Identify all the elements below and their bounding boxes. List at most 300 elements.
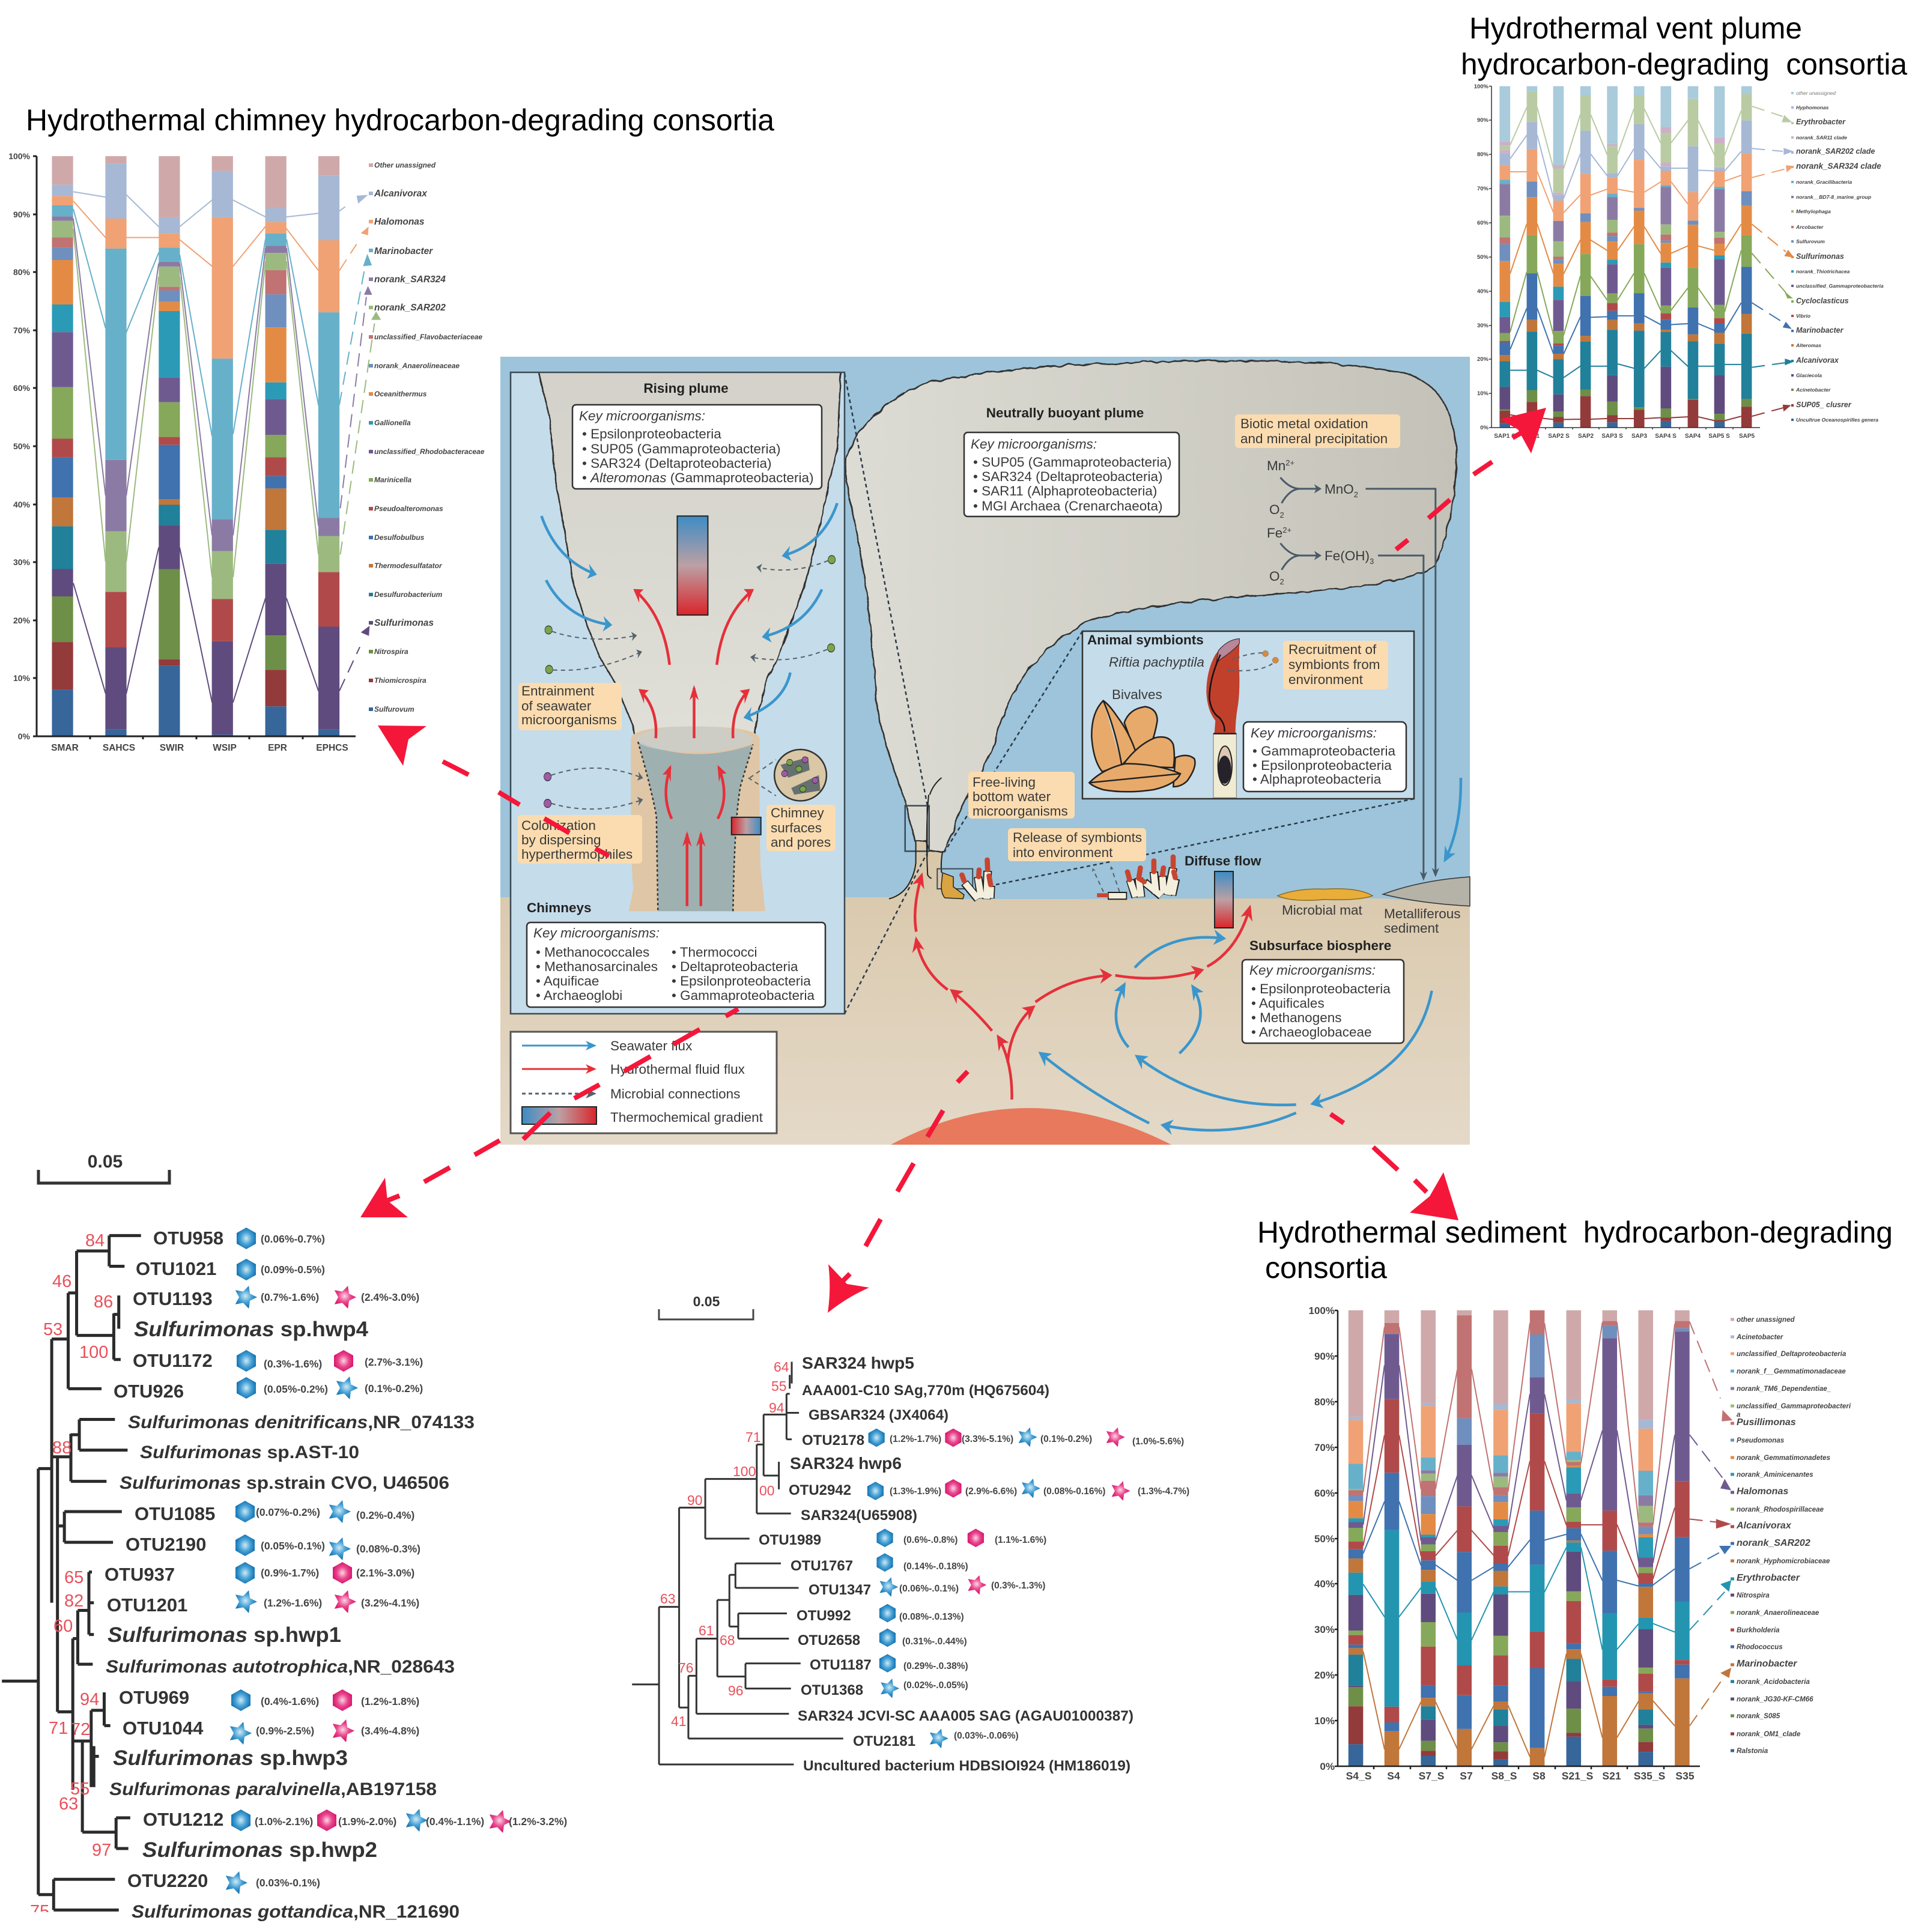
sediment axes <box>1335 1310 1700 1769</box>
taxon labels: OTU937 <box>105 1564 175 1585</box>
taxon labels: OTU1021 <box>136 1258 216 1279</box>
flux legend: Thermochemical gradient <box>610 1110 763 1125</box>
abundance icons and ranges: (0.2%-0.4%) <box>356 1509 414 1521</box>
abundance icons and ranges: (0.03%-0.1%) <box>256 1877 320 1889</box>
plume legend: norank_SAR202 clade <box>1796 147 1875 156</box>
thermochemical gradient, chimney wall <box>732 817 761 835</box>
taxon labels: OTU2181 <box>853 1733 915 1749</box>
plume legend: Methylophaga <box>1796 208 1831 214</box>
sediment x-axis labels: S4 <box>1387 1770 1400 1782</box>
reaction labels: O <box>1269 569 1280 584</box>
bootstrap values: 65 <box>64 1568 83 1587</box>
sediment legend: Pseudomonas <box>1737 1437 1785 1444</box>
title: hydrothermal chimney: Hydrothermal chimney hydrocarbon-degrading consortia <box>26 103 774 137</box>
magma dome <box>891 1108 1171 1145</box>
abundance icons and ranges: (3.2%-4.1%) <box>361 1597 419 1609</box>
rising plume drawing <box>537 365 841 911</box>
key microorganisms: neutrally buoyant plume: • SAR11 (Alphaproteobacteria) <box>973 483 1157 498</box>
zoom dotted connectors <box>845 374 1414 1014</box>
taxon labels: OTU2658 <box>798 1632 860 1649</box>
callout: recruitment <box>1283 641 1388 689</box>
riftia label: Riftia pachyptila <box>1109 655 1204 670</box>
key microorganisms: chimneys: • Gammaproteobacteria <box>672 988 815 1003</box>
sediment x-axis labels: S8 <box>1532 1770 1546 1782</box>
callout: chimney surfaces: and pores <box>771 835 831 850</box>
diffuse flow gradient <box>1215 871 1233 928</box>
sediment y-axis labels <box>1309 1305 1335 1772</box>
key microorganisms: rising plume: • Epsilonproteobacteria <box>582 426 721 441</box>
taxon labels: SAR324 hwp6 <box>790 1454 902 1473</box>
abundance icons and ranges: (0.1%-0.2%) <box>365 1382 423 1394</box>
abundance icons and ranges: (0.05%-0.2%) <box>264 1383 328 1395</box>
plume y-axis labels: 20% <box>1477 356 1489 363</box>
taxon labels: OTU2942 <box>789 1482 851 1498</box>
sediment legend: Burkholderia <box>1737 1626 1780 1634</box>
taxon labels: GBSAR324 (JX4064) <box>809 1407 948 1423</box>
sediment legend: norank_Hyphomicrobiaceae <box>1737 1557 1830 1565</box>
chimney legend: Marinicella <box>374 476 411 484</box>
plume bars and connectors <box>1505 86 1794 428</box>
taxon labels: OTU1201 <box>107 1594 187 1616</box>
abundance icons and ranges: (0.08%-0.16%) <box>1043 1486 1105 1497</box>
key microorganisms: subsurface: • Methanogens <box>1251 1010 1341 1025</box>
chimney legend: unclassified_Rhodobacteraceae <box>374 447 485 456</box>
bootstrap values <box>30 1231 113 1921</box>
abundance icons and ranges: (0.31%-.0.44%) <box>902 1637 967 1647</box>
plume legend: SUP05_ clusrer <box>1796 401 1852 409</box>
bootstrap values: 55 <box>771 1378 787 1394</box>
abundance icons and ranges: (0.02%-.0.05%) <box>903 1680 968 1691</box>
chimney x-axis labels: SWIR <box>160 743 184 753</box>
plume legend: Uncultrue Oceanospirilles genera <box>1796 417 1878 423</box>
key microorganisms: rising plume: • Alteromonas (Gammaproteobacteria) <box>582 470 814 485</box>
title: hydrothermal sediment <box>1257 1216 1893 1285</box>
taxon labels: OTU2178 <box>802 1432 864 1449</box>
taxon labels: OTU1767 <box>791 1558 853 1574</box>
sediment legend: norank_OM1_clade <box>1737 1730 1801 1738</box>
bootstrap values: 90 <box>687 1492 703 1508</box>
sediment legend: norank_Anaerolineaceae <box>1737 1609 1819 1617</box>
sediment y-axis labels: 10% <box>1314 1715 1335 1727</box>
metalliferous sediment mound <box>1383 877 1470 906</box>
sediment legend: unclassified_Gammaproteobacteri <box>1737 1402 1851 1410</box>
chimney x-axis labels: SAHCS <box>103 743 135 753</box>
bootstrap values: 63 <box>660 1591 676 1606</box>
taxon labels: Sulfurimonas gottandica ,NR_121690 <box>132 1902 460 1922</box>
abundance icons and ranges: (1.2%-1.6%) <box>264 1597 322 1609</box>
bootstrap values: 00 <box>759 1483 775 1498</box>
chimney legend: Halomonas <box>374 217 425 227</box>
plume x-axis labels: SAP5 <box>1739 433 1755 440</box>
reaction labels: 2+ <box>1282 525 1291 534</box>
plume legend: Acinetobacter <box>1795 387 1831 393</box>
bootstrap values: 82 <box>64 1591 83 1611</box>
arrow: to plume chart <box>1396 408 1546 550</box>
taxon labels: OTU969 <box>119 1687 189 1708</box>
key microorganisms: neutrally buoyant plume: • SAR324 (Deltaproteobacteria) <box>973 469 1163 484</box>
key microorganisms: rising plume: • SUP05 (Gammaproteobacteria) <box>582 441 781 456</box>
sediment y-axis labels: 0% <box>1320 1761 1335 1772</box>
bootstrap values: 71 <box>745 1429 761 1445</box>
bootstrap values: 75 <box>30 1902 49 1921</box>
plume x-axis labels: SAP5 S <box>1708 433 1730 440</box>
metalliferous sediment label: sediment <box>1384 921 1439 936</box>
seafloor sediment <box>500 841 1470 1145</box>
sediment legend: norank_TM6_Dependentiae_ <box>1737 1385 1831 1393</box>
sediment y-axis labels: 60% <box>1314 1488 1335 1499</box>
abundance icons and ranges <box>867 1425 1189 1749</box>
abundance icons and ranges: (1.3%-4.7%) <box>1138 1486 1189 1497</box>
taxon labels: Sulfurimonas sp.strain CVO, U46506 <box>120 1473 449 1493</box>
taxon labels: Sulfurimonas sp.AST-10 <box>140 1443 359 1462</box>
chimney y-axis labels: 80% <box>13 267 31 277</box>
neutrally buoyant plume <box>846 361 1456 851</box>
bootstrap values: 46 <box>52 1272 71 1291</box>
abundance icons and ranges: (0.9%-2.5%) <box>256 1725 314 1737</box>
taxon labels: OTU2220 <box>127 1870 208 1891</box>
key microorganisms: subsurface <box>1242 960 1404 1043</box>
middle phylogenetic tree: SAR324 <box>632 1294 1189 1774</box>
chimney y-axis labels: 30% <box>13 557 31 567</box>
plume legend: norank__BD7-8_marine_group <box>1796 194 1871 200</box>
reaction labels <box>1267 458 1374 586</box>
title: hydrothermal sediment: consortia <box>1265 1251 1387 1285</box>
abundance icons and ranges: (2.9%-6.6%) <box>965 1486 1017 1497</box>
plume y-axis labels: 60% <box>1477 220 1489 226</box>
sediment x-axis labels <box>1346 1770 1695 1782</box>
chimney legend <box>369 161 485 713</box>
key microorganisms: neutrally buoyant plume: Key microorganisms: <box>971 437 1097 452</box>
chimney y-axis labels: 100% <box>8 151 31 161</box>
abundance icons and ranges: (1.9%-2.0%) <box>338 1815 396 1828</box>
arrow: to SAR324 tree <box>828 1071 968 1313</box>
chimney legend: Marinobacter <box>374 246 433 256</box>
abundance icons and ranges: (1.3%-1.9%) <box>890 1486 941 1497</box>
sediment legend: norank_Aminicenantes <box>1737 1471 1813 1479</box>
bootstrap values: 100 <box>733 1464 756 1479</box>
plume legend: Vibrio <box>1796 313 1810 319</box>
plume y-axis labels: 90% <box>1477 117 1489 124</box>
taxon labels: OTU1212 <box>143 1809 223 1830</box>
sediment legend: norank_Gemmatimonadetes <box>1737 1454 1830 1462</box>
chimney y-axis labels: 50% <box>13 441 31 451</box>
callout: colonization: hyperthermophiles <box>521 847 633 862</box>
plume legend: Arcobacter <box>1795 224 1824 230</box>
abundance icons and ranges: (1.2%-1.7%) <box>890 1434 941 1444</box>
bootstrap values: 94 <box>80 1690 99 1709</box>
callout: chimney surfaces: Chimney <box>771 805 825 820</box>
bootstrap values: 71 <box>49 1719 68 1738</box>
key microorganisms box: • Epsilonproteobacteria <box>1252 758 1392 773</box>
key microorganisms: neutrally buoyant plume: • SUP05 (Gammaproteobacteria) <box>973 455 1172 470</box>
key microorganisms: chimneys: • Methanococcales <box>536 945 649 960</box>
key microorganisms box <box>1243 722 1406 792</box>
plume legend: norank_Thiotrichacea <box>1796 268 1850 274</box>
sediment legend: Marinobacter <box>1737 1659 1797 1669</box>
key microorganisms: subsurface: • Aquificales <box>1251 996 1325 1011</box>
sediment legend: Nitrospira <box>1737 1591 1770 1599</box>
abundance icons and ranges: (0.4%-1.6%) <box>261 1695 319 1707</box>
animal symbionts heading: Animal symbionts <box>1087 632 1204 647</box>
key microorganisms: subsurface: Key microorganisms: <box>1249 963 1376 978</box>
key microorganisms: chimneys: • Archaeoglobi <box>536 988 622 1003</box>
sediment y-axis labels: 70% <box>1314 1442 1335 1453</box>
chimney legend: Desulfobulbus <box>374 533 425 542</box>
taxon labels: OTU1187 <box>810 1657 872 1673</box>
sediment legend <box>1731 1316 1851 1755</box>
tubeworm and bivalve communities <box>941 857 1176 899</box>
bootstrap values: 60 <box>53 1617 73 1636</box>
plume legend: Alteromas <box>1795 342 1821 348</box>
abundance icons and ranges: (3.4%-4.8%) <box>361 1725 419 1737</box>
chimney x-axis labels <box>51 743 348 753</box>
taxon labels: OTU1193 <box>133 1288 213 1309</box>
abundance icons and ranges: (0.1%-0.2%) <box>1040 1434 1092 1444</box>
plume legend: Hyphomonas <box>1796 104 1829 111</box>
chimney legend: Sulfurovum <box>374 705 414 713</box>
abundance icons and ranges: (0.9%-1.7%) <box>261 1567 319 1579</box>
plume legend: norank_SAR324 clade <box>1796 162 1881 171</box>
taxon labels: Uncultured bacterium HDBSIOI924 (HM186019) <box>803 1758 1130 1774</box>
chimney x-axis labels: WSIP <box>213 743 237 753</box>
chimneys heading: Chimneys <box>527 900 592 915</box>
taxon labels: OTU1368 <box>801 1682 863 1698</box>
bootstrap values: 88 <box>52 1438 71 1458</box>
sediment legend: Ralstonia <box>1737 1747 1768 1755</box>
chimney legend: Thiomicrospira <box>374 676 426 685</box>
callout: chimney surfaces <box>766 805 836 851</box>
chimney bars and connectors <box>62 156 381 736</box>
chimney y-axis labels: 40% <box>13 500 31 509</box>
callout: release of symbionts: Release of symbionts <box>1013 830 1142 845</box>
flux legend: Hydrothermal fluid flux <box>610 1062 745 1077</box>
sediment legend: norank_S085 <box>1737 1712 1780 1720</box>
callout: biotic metal oxidation: Biotic metal oxidation <box>1240 416 1368 431</box>
sediment legend: norank_Rhodospirillaceae <box>1737 1506 1824 1513</box>
abundance icons and ranges: (1.2%-1.8%) <box>361 1695 419 1707</box>
plume legend: Sulfurovum <box>1796 238 1825 244</box>
reaction labels: O <box>1269 502 1280 517</box>
abundance icons and ranges: (0.03%-.0.06%) <box>954 1731 1019 1741</box>
left phylogenetic tree: Sulfurimonas <box>2 1152 567 1922</box>
bootstrap values: 68 <box>720 1632 735 1648</box>
bootstrap values: 41 <box>671 1713 687 1729</box>
bootstrap values: 97 <box>92 1841 111 1860</box>
icon: riftia tubeworm <box>1206 638 1278 798</box>
chimney legend: Desulfurobacterium <box>374 590 443 599</box>
reaction labels: 3 <box>1370 557 1374 566</box>
chimney axes <box>33 156 356 739</box>
bootstrap values: 64 <box>774 1359 789 1375</box>
icon: bivalves <box>1089 701 1195 792</box>
bootstrap values: 86 <box>94 1292 113 1312</box>
bootstrap values: 94 <box>769 1400 784 1416</box>
sediment y-axis labels: 100% <box>1309 1305 1335 1316</box>
chimney legend: Oceanithermus <box>374 390 427 398</box>
abundance icons and ranges: (0.4%-1.1%) <box>426 1815 484 1828</box>
arrow: to Sulfurimonas tree <box>360 1009 738 1217</box>
bootstrap values <box>660 1359 789 1729</box>
taxon labels: SAR324 hwp5 <box>802 1354 914 1372</box>
callout: free-living <box>968 772 1075 819</box>
bootstrap values: 55 <box>70 1779 90 1799</box>
metalliferous sediment label: Metalliferous <box>1384 906 1461 921</box>
chimney legend: Pseudoalteromonas <box>374 504 443 513</box>
taxon labels: Sulfurimonas sp.hwp3 <box>113 1746 348 1770</box>
bootstrap values: 96 <box>728 1683 744 1698</box>
microbial mat label: Microbial mat <box>1282 903 1363 918</box>
chimney x-axis labels: EPHCS <box>316 743 348 753</box>
sediment legend: other unassigned <box>1737 1316 1795 1324</box>
key microorganisms box: Key microorganisms: <box>1251 725 1377 740</box>
sediment y-axis labels: 30% <box>1314 1624 1335 1635</box>
plume y-axis labels: 100% <box>1474 83 1489 90</box>
title: vent plume <box>1461 11 1907 81</box>
abundance icons and ranges: (0.6%-.0.8%) <box>903 1535 957 1545</box>
callout: entrainment <box>518 683 622 730</box>
chimney y-axis labels: 10% <box>13 673 31 683</box>
abundance icons and ranges: (1.0%-2.1%) <box>255 1815 313 1828</box>
seawater arrows <box>541 503 837 717</box>
sediment x-axis labels: S8_S <box>1492 1770 1517 1782</box>
sediment legend: Halomonas <box>1737 1486 1788 1497</box>
chimney legend: Alcanivorax <box>374 189 428 199</box>
sediment y-axis labels: 90% <box>1314 1351 1335 1362</box>
callout: biotic metal oxidation: and mineral precipitation <box>1240 431 1388 446</box>
chimney legend: Thermodesulfatator <box>374 562 443 570</box>
thermochemical gradient, plume <box>677 516 708 615</box>
plume x-axis labels: SAP4 S <box>1655 433 1677 440</box>
abundance icons and ranges: (2.7%-3.1%) <box>365 1356 423 1368</box>
background seawater <box>500 357 1470 1145</box>
plume x-axis labels: SAP3 <box>1631 433 1647 440</box>
chimney legend: Nitrospira <box>374 647 408 656</box>
abundance icons and ranges: (0.3%-1.6%) <box>264 1358 322 1370</box>
arrow: to chimney chart <box>378 725 609 856</box>
key microorganisms: neutrally buoyant plume <box>964 432 1179 516</box>
sediment x-axis labels: S4_S <box>1346 1770 1371 1782</box>
abundance icons and ranges: (2.4%-3.0%) <box>361 1291 419 1303</box>
chimney legend: Sulfurimonas <box>374 618 434 628</box>
sediment legend: norank_JG30-KF-CM66 <box>1737 1695 1813 1703</box>
taxon labels <box>105 1228 475 1922</box>
chimney legend: Other unassigned <box>374 161 436 169</box>
abundance icons and ranges: (0.7%-1.6%) <box>261 1291 319 1303</box>
callout: free-living: bottom water <box>973 789 1051 804</box>
sediment legend: unclassified_Deltaproteobacteria <box>1737 1350 1847 1358</box>
taxon labels: Sulfurimonas denitrificans ,NR_074133 <box>128 1413 475 1432</box>
chimney y-axis labels: 90% <box>13 210 31 219</box>
sediment legend: norank_f__Gemmatimonadaceae <box>1737 1367 1846 1375</box>
central diagram: hydrothermal vent system <box>500 357 1470 1145</box>
key microorganisms: neutrally buoyant plume: • MGI Archaea (Crenarchaeota) <box>973 498 1163 513</box>
small vent chimney <box>889 778 973 899</box>
neutrally buoyant heading: Neutrally buoyant plume <box>986 405 1144 420</box>
sediment x-axis labels: S35_S <box>1634 1770 1665 1782</box>
chimney legend: norank_SAR202 <box>374 303 446 313</box>
abundance icons and ranges: (1.2%-3.2%) <box>509 1815 567 1828</box>
plume legend: unclassified_Gammaproteobacteria <box>1796 283 1884 289</box>
abundance icons and ranges: (0.3%-.1.3%) <box>991 1581 1045 1591</box>
plume legend: Glaciecola <box>1796 372 1822 378</box>
bootstrap values: 100 <box>79 1343 108 1362</box>
plume y-axis labels: 80% <box>1477 151 1489 158</box>
plume y-axis labels: 0% <box>1480 425 1489 431</box>
chimney y-axis labels <box>8 151 31 741</box>
taxon labels: OTU926 <box>114 1381 184 1402</box>
tree branches <box>632 1362 843 1764</box>
callout: release of symbionts: into environment <box>1013 845 1113 860</box>
abundance icons and ranges: (0.05%-0.1%) <box>261 1540 325 1552</box>
sediment legend: norank_Acidobacteria <box>1737 1678 1810 1686</box>
flux legend: Microbial connections <box>610 1086 740 1101</box>
abundance icons and ranges: (0.07%-0.2%) <box>256 1506 320 1518</box>
plume legend: other unassigned <box>1796 90 1836 96</box>
key microorganisms: subsurface: • Archaeoglobaceae <box>1251 1025 1372 1040</box>
plume y-axis labels: 40% <box>1477 288 1489 295</box>
callout: chimney surfaces: surfaces <box>771 820 822 835</box>
sediment legend: Rhodococcus <box>1737 1643 1783 1651</box>
subsurface heading: Subsurface biosphere <box>1249 938 1391 953</box>
chimney y-axis labels: 20% <box>13 616 31 625</box>
key microorganisms: rising plume: Key microorganisms: <box>579 408 705 423</box>
callout: recruitment: Recruitment of <box>1288 642 1377 657</box>
abundance icons and ranges: (0.06%-.0.1%) <box>899 1584 959 1594</box>
key microorganisms: chimneys: • Aquificae <box>536 974 599 989</box>
tree branches <box>2 1235 141 1910</box>
plume x-axis labels: SAP4 <box>1685 433 1701 440</box>
sediment x-axis labels: S7_S <box>1419 1770 1444 1782</box>
key microorganisms box: • Alphaproteobacteria <box>1252 772 1382 787</box>
plume legend: Sulfurimonas <box>1796 252 1844 261</box>
key microorganisms: chimneys: • Thermococci <box>672 945 757 960</box>
callout: free-living: microorganisms <box>973 804 1068 819</box>
flux legend <box>511 1032 777 1133</box>
diffuse flow label: Diffuse flow <box>1185 853 1261 868</box>
key microorganisms: chimneys: • Deltaproteobacteria <box>672 959 798 974</box>
plume y-axis labels: 30% <box>1477 323 1489 329</box>
key microorganisms box: • Gammaproteobacteria <box>1252 743 1395 759</box>
abundance icons and ranges: (1.1%-1.6%) <box>995 1535 1046 1545</box>
taxon labels: Sulfurimonas sp.hwp2 <box>142 1838 377 1862</box>
taxon labels: AAA001-C10 SAg,770m (HQ675604) <box>802 1382 1049 1399</box>
chimney legend: norank_Anaerolineaceae <box>374 362 460 370</box>
reaction labels: 2 <box>1280 510 1284 519</box>
plume y-axis labels: 10% <box>1477 390 1489 397</box>
plume legend <box>1791 90 1884 423</box>
abundance icons and ranges <box>222 1228 567 1895</box>
key microorganisms: chimneys: • Methanosarcinales <box>536 959 658 974</box>
plume y-axis labels <box>1474 83 1489 431</box>
chimney y-axis labels: 60% <box>13 383 31 393</box>
callout: biotic metal oxidation <box>1235 414 1400 448</box>
plume legend: Alcanivorax <box>1795 356 1839 365</box>
chimney legend: Gallionella <box>374 419 411 427</box>
title: vent plume: Hydrothermal vent plume <box>1469 11 1802 45</box>
plume x-axis labels: SAP2 <box>1578 433 1594 440</box>
panel: animal symbionts <box>1082 631 1414 799</box>
scale bar: 0.05 <box>693 1294 720 1309</box>
sediment legend: Pusillimonas <box>1737 1417 1796 1428</box>
plume x-axis labels: SAP1 <box>1524 433 1540 440</box>
reaction labels: MnO <box>1325 482 1354 497</box>
taxon labels: OTU1172 <box>133 1350 213 1371</box>
arrow: to sediment chart <box>1331 1114 1458 1220</box>
title: hydrothermal sediment: Hydrothermal sediment hydrocarbon-degrading <box>1257 1216 1893 1249</box>
taxon labels: OTU992 <box>797 1608 851 1624</box>
taxon labels <box>759 1354 1133 1774</box>
key microorganisms: rising plume: • SAR324 (Deltaproteobacteria) <box>582 456 772 471</box>
